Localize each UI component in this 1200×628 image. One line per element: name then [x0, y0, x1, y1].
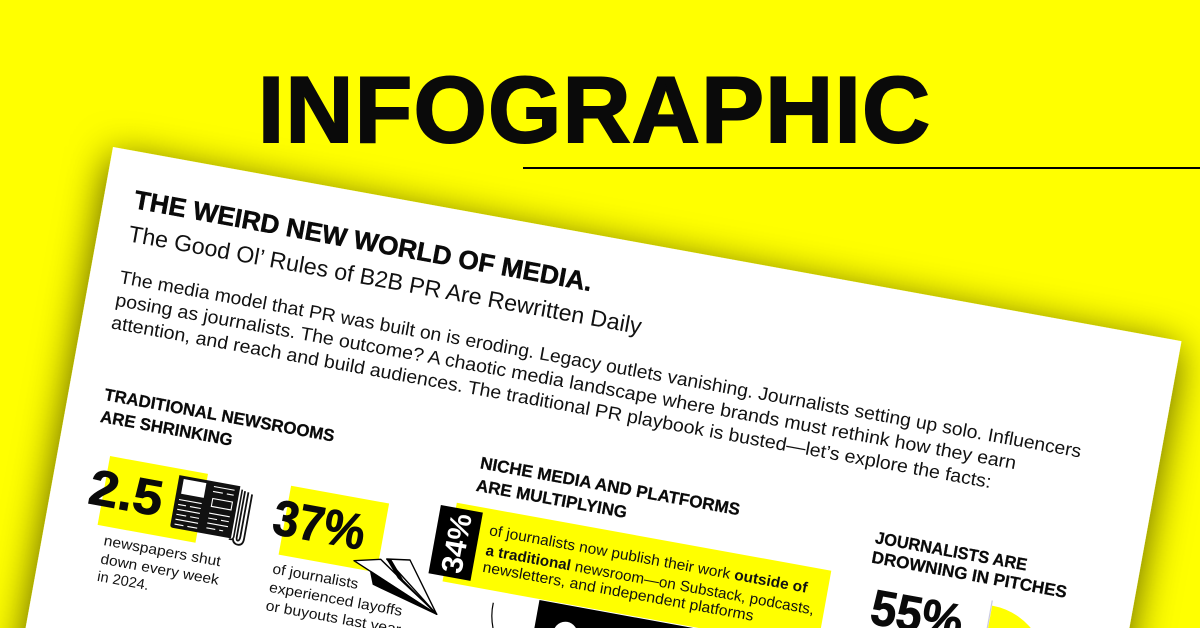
heading rule: [523, 167, 1200, 169]
callout text: of journalists now publish their work outside of: [488, 522, 810, 597]
section heading: niche media: NICHE MEDIA AND PLATFORMS: [479, 453, 742, 519]
stat caption: layoffs: of journalists: [271, 561, 360, 593]
stat badge: 34%: 34%: [436, 511, 479, 576]
section heading: pitches: JOURNALISTS ARE: [874, 528, 1029, 575]
page subtitle: The Good Ol’ Rules of B2B PR Are Rewritten Daily: [127, 220, 644, 339]
page title: THE WEIRD NEW WORLD OF MEDIA.: [132, 184, 595, 297]
icon: newspaper: [169, 475, 253, 546]
stat badge: 34%: [428, 505, 483, 581]
page background: [2, 147, 1181, 628]
stat caption: newspapers: down every week: [99, 552, 221, 589]
section heading: pitches: DROWNING IN PITCHES: [870, 548, 1068, 602]
section heading: niche media: ARE MULTIPLYING: [475, 476, 629, 522]
stat caption: layoffs: [264, 561, 409, 628]
stat caption: newspapers: in 2024.: [96, 569, 150, 594]
icon: paper plane: [354, 559, 437, 614]
callout banner: 34%: [443, 503, 831, 628]
illustration: thin curve: [492, 603, 493, 628]
stat number: 2.5: 2.5: [85, 459, 168, 527]
illustration: black media block: [523, 600, 712, 628]
section heading: newsrooms: ARE SHRINKING: [99, 407, 234, 450]
callout text: [481, 522, 819, 628]
intro paragraph: The media model that PR was built on is eroding. Legacy outlets vanishing. Journalists setting up solo. Influencers: [118, 266, 1083, 462]
callout text: a traditional newsroom—on Substack, podcasts,: [484, 542, 815, 619]
stat caption: newspapers: [96, 533, 224, 606]
section heading: newsrooms: TRADITIONAL NEWSROOMS: [103, 385, 336, 446]
stat caption: layoffs: experienced layoffs: [268, 580, 403, 620]
intro paragraph: attention, and reach and build audiences. The traditional PR playbook is busted—let’s explore the facts:: [110, 312, 993, 492]
stat highlight: 2.5: [98, 456, 208, 543]
pie chart: 55%: [948, 597, 1058, 628]
callout text: newsletters, and independent platforms: [481, 559, 755, 625]
intro paragraph: posing as journalists. The outcome? A chaotic media landscape where brands must rethink how they earn: [114, 289, 1018, 473]
heading: INFOGRAPHIC: INFOGRAPHIC: [258, 57, 930, 162]
stat caption: newspapers: newspapers shut: [102, 533, 222, 570]
panel: tilted infographic page: [2, 147, 1181, 628]
stat highlight: 37%: [279, 486, 389, 572]
stat number: 37%: 37%: [269, 489, 370, 561]
